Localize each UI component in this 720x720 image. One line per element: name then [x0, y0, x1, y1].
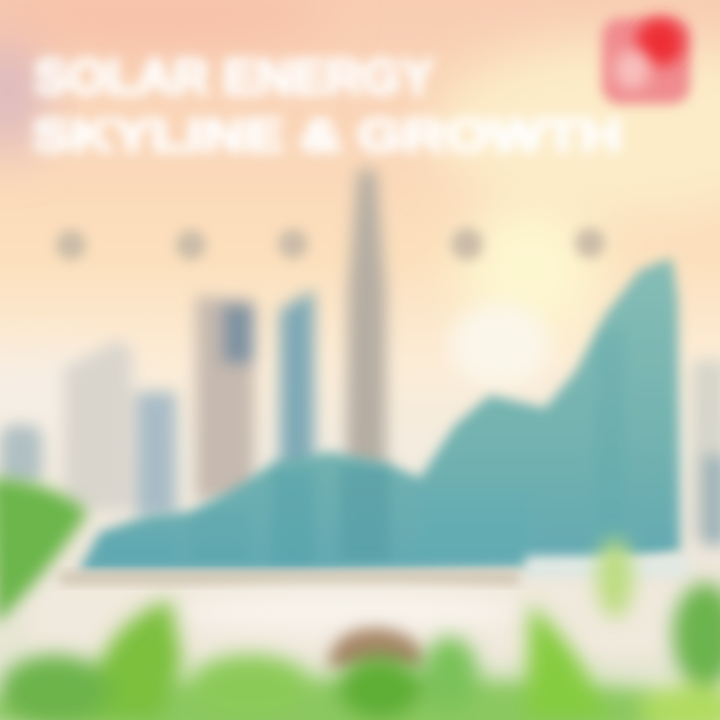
markers: top of chart columns	[56, 228, 605, 260]
skyline buildings	[0, 170, 720, 545]
ground band	[30, 556, 700, 657]
foliage: bottom plants	[0, 538, 720, 720]
building: far left	[0, 425, 42, 485]
building: pale tower	[64, 340, 132, 510]
title: SOLAR ENERGY	[34, 49, 434, 105]
building: taupe tower	[196, 296, 254, 500]
building: blue grey	[136, 392, 176, 517]
foliage: large left leaf	[0, 478, 88, 625]
icon: red badge	[602, 18, 690, 104]
chart columns	[272, 470, 314, 565]
building: far right	[692, 360, 720, 540]
icon: brown arch	[328, 628, 428, 668]
building: teal tower	[280, 290, 314, 480]
area chart: teal growth	[78, 258, 680, 572]
building: tall spire	[346, 170, 386, 470]
title: SKYLINE & GROWTH	[32, 109, 622, 161]
title	[32, 49, 622, 161]
